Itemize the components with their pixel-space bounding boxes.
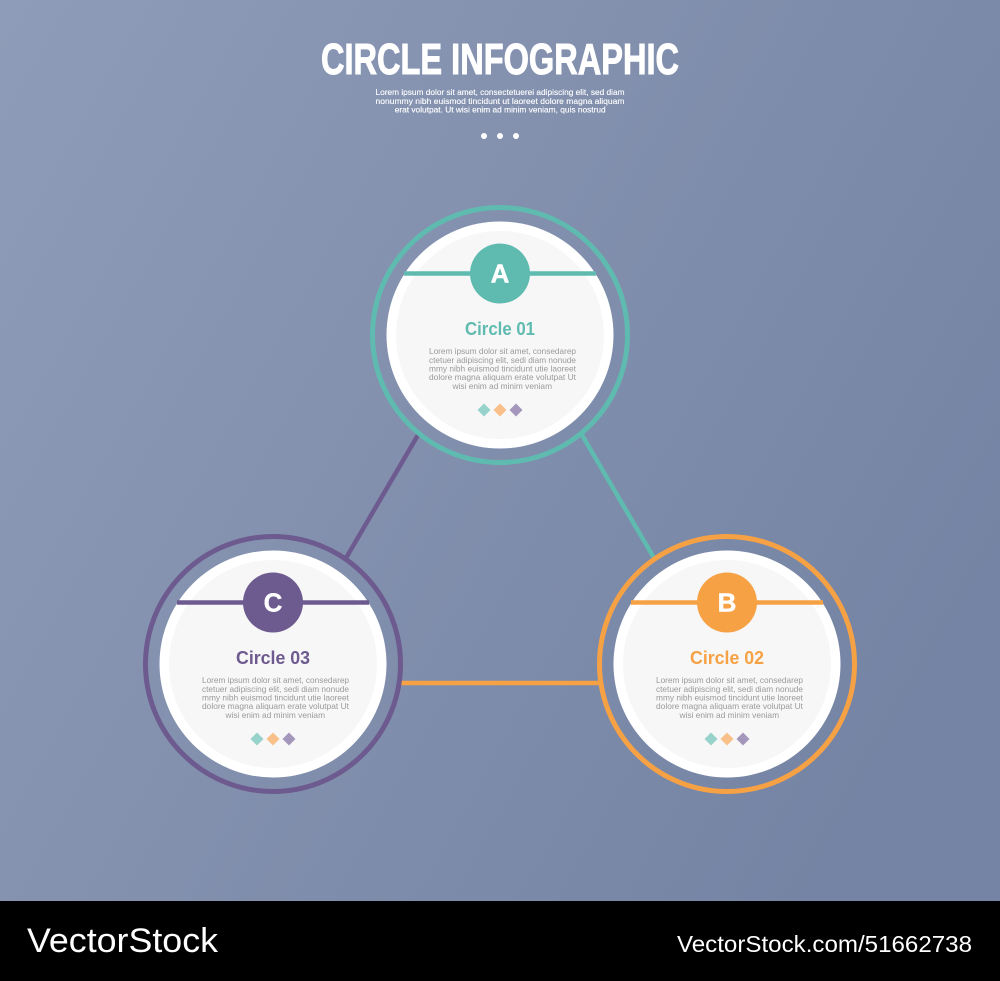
- header: [321, 35, 679, 139]
- body text C: ctetuer adipiscing elit, sedi diam nonude: [202, 684, 349, 694]
- body text A: wisi enim ad minim veniam: [452, 381, 552, 391]
- badge A: [470, 244, 530, 304]
- badge B: [697, 572, 757, 632]
- body text C: Lorem ipsum dolor sit amet, consedarep: [202, 675, 349, 685]
- panel: circle 02: [600, 536, 854, 792]
- watermark banner: [0, 901, 1000, 981]
- diamonds A: [478, 404, 522, 416]
- outer ring B: [600, 536, 854, 792]
- divider line C: [177, 600, 369, 605]
- badge A: A: [491, 258, 510, 288]
- body text B: mmy nibh euismod tincidunt utie laoreet: [656, 692, 804, 702]
- brand name: VectorStock: [27, 922, 219, 960]
- title: CIRCLE INFOGRAPHIC: [321, 35, 679, 84]
- outer ring C: [146, 536, 400, 792]
- panel: circle 03: [146, 536, 400, 792]
- diamonds C: [250, 732, 296, 746]
- white disc C: [160, 550, 386, 778]
- white disc B: [614, 550, 840, 778]
- connector lines: [346, 435, 654, 683]
- badge C: C: [264, 588, 283, 618]
- body text C: dolore magna aliquam erate volutpat Ut: [202, 701, 350, 711]
- heading C: Circle 03: [236, 648, 310, 668]
- badge C: [243, 572, 303, 632]
- inner disc C: [169, 560, 377, 768]
- body text A: dolore magna aliquam erate volutpat Ut: [429, 372, 577, 382]
- body text A: mmy nibh euismod tincidunt utie laoreet: [429, 364, 577, 374]
- body text B: [656, 675, 804, 720]
- body text B: Lorem ipsum dolor sit amet, consedarep: [656, 675, 803, 685]
- divider line A: [404, 271, 596, 276]
- outer ring A: [372, 208, 628, 462]
- body text C: wisi enim ad minim veniam: [225, 710, 325, 720]
- body text A: ctetuer adipiscing elit, sedi diam nonude: [429, 355, 576, 365]
- subtitle text: [376, 87, 625, 114]
- white disc A: [386, 222, 614, 448]
- image URL: VectorStock.com/51662738: [677, 931, 972, 957]
- body text C: [202, 675, 350, 720]
- header dots: [481, 133, 519, 139]
- heading B: Circle 02: [690, 648, 764, 668]
- body text A: [429, 346, 577, 391]
- body text A: Lorem ipsum dolor sit amet, consedarep: [429, 346, 576, 356]
- subtitle text: erat volutpat. Ut wisi enim ad minim veniam, quis nostrud: [395, 104, 606, 114]
- heading A: Circle 01: [465, 319, 535, 339]
- inner disc B: [623, 560, 831, 768]
- body text C: mmy nibh euismod tincidunt utie laoreet: [202, 692, 350, 702]
- diamonds B: [704, 732, 750, 746]
- panel: circle 01: [372, 208, 628, 462]
- subtitle text: Lorem ipsum dolor sit amet, consectetuerei adipiscing elit, sed diam: [376, 87, 625, 97]
- body text B: dolore magna aliquam erate volutpat Ut: [656, 701, 804, 711]
- inner disc A: [396, 231, 604, 439]
- body text B: ctetuer adipiscing elit, sedi diam nonude: [656, 684, 803, 694]
- divider line B: [631, 600, 823, 605]
- body text B: wisi enim ad minim veniam: [679, 710, 779, 720]
- subtitle text: nonummy nibh euismod tincidunt ut laoreet dolore magna aliquam: [376, 96, 625, 106]
- badge B: B: [718, 588, 736, 618]
